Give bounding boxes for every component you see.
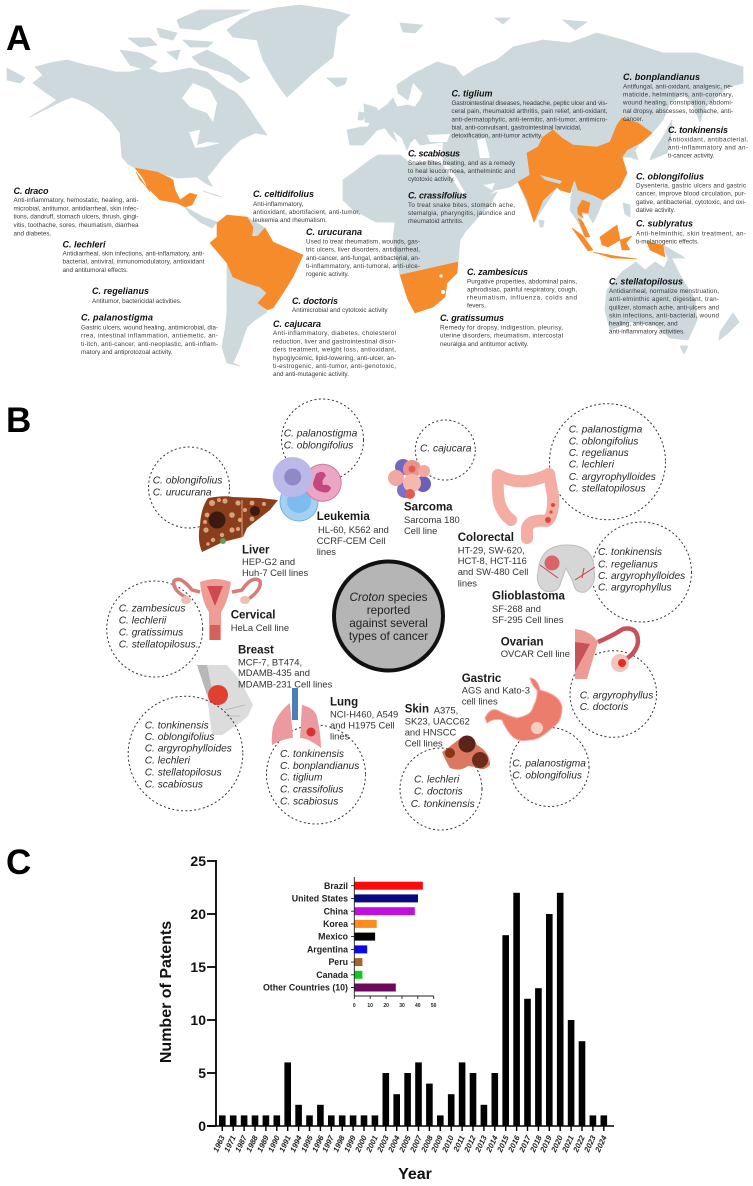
text: C. scabiosus: cytotoxic activity. (408, 176, 455, 183)
label: colorectal: HCT-8, HCT-116 (458, 555, 527, 566)
text: C. celtidifolius: C. celtidifolius (253, 189, 314, 199)
text: C. zambesicus: C. zambesicus (467, 267, 528, 277)
x axis year labels: 2024 (593, 1133, 609, 1154)
text: C. tonkinensis: C. tonkinensis (668, 125, 728, 135)
species circle: gastric (510, 728, 589, 806)
text: C. oblongifolius: Dysenteria, gastric ulcers and gastric (636, 183, 746, 190)
text: C. scabiosus: Snake bites treating, and as a remedy (408, 160, 516, 167)
text: C. zambesicus: fevers. (467, 303, 486, 310)
icon: skin lesion (442, 736, 490, 770)
inset country labels: China (324, 906, 348, 916)
map: highlighted countries (135, 118, 665, 313)
text: C. celtidifolius: antioxidant, abortifacient, anti-tumor, (253, 209, 360, 216)
label: lung (330, 696, 398, 741)
panel label A: A (6, 19, 31, 58)
species circle: breast: C. stellatopilosus (145, 767, 222, 778)
species circle: lung (266, 725, 366, 824)
text: C. stellatopilosus: healing, anti-cancer, and (609, 320, 678, 327)
label: breast: Breast (238, 644, 274, 656)
centre circle: reported (367, 604, 410, 617)
inset: patents by country bar chart (263, 877, 437, 1009)
text: C. crassifolius: stemalgia, pharyngitis, jaundice and (408, 210, 515, 217)
text: C. stellatopilosus: skin infections, anti-bacterial, wound (609, 312, 719, 319)
text: C. palanostigma: C. palanostigma (81, 313, 153, 323)
species circle: lung: C. tiglium (280, 772, 323, 783)
text: C. stellatopilosus (609, 277, 719, 336)
inset country labels: Korea (323, 919, 348, 929)
label: ovarian: OVCAR Cell line (501, 648, 570, 659)
species circle: colorectal: C. stellatopilosus (569, 484, 646, 495)
label: skin: Cell lines (405, 738, 443, 749)
label: gastric (462, 673, 530, 707)
species circle: sarcoma: C. cajucara (420, 444, 472, 455)
species circle: gastric: C. oblongifolius (512, 770, 582, 781)
species circle: ovarian: C. doctoris (580, 702, 628, 713)
species circle: glioblastoma (592, 522, 692, 622)
icon: sarcoma cell cluster (388, 459, 431, 499)
x axis year labels: 2001 (364, 1134, 380, 1154)
text: C. crassifolius: C. crassifolius (408, 191, 467, 201)
label: liver: HEP-G2 and (242, 556, 295, 567)
text: C. zambesicus: rheumatism, influenza, colds and (467, 295, 577, 302)
x axis year labels: 2014 (484, 1133, 500, 1154)
text: C. zambesicus (467, 267, 577, 310)
inset country labels: Other Countries (10) (263, 983, 348, 993)
text: C. oblongifolius (636, 171, 746, 214)
text: C. sublyratus: Anti-helminthic, skin treatment, an- (636, 230, 746, 237)
text: C. cajucara: C. cajucara (273, 319, 321, 329)
text: C. tiglium: anti-dermatophytic, anti-termitic, anti-tumor, antimicro- (452, 116, 608, 123)
x axis year labels: 1995 (299, 1133, 315, 1154)
text: C. zambesicus: Purgative properties, abdominal pains, (467, 278, 577, 285)
text: C. cajucara (273, 319, 396, 378)
label: skin (405, 704, 470, 749)
x axis year labels: 2017 (517, 1133, 533, 1154)
text: C. draco: microbial, antitumor, antidiarrheal, skin infec- (14, 205, 138, 212)
text: C. bonplandianus (622, 72, 733, 123)
panel label B: B (6, 401, 31, 440)
text: C. tiglium (452, 88, 608, 139)
label: glioblastoma (492, 591, 565, 625)
text: C. stellatopilosus: C. stellatopilosus (609, 277, 683, 287)
text: C. palanostigma: rrea, intestinal inflammation, antiemetic, an- (81, 333, 218, 340)
x axis year labels: 2020 (549, 1133, 565, 1154)
text: C. draco: and diabetes. (14, 230, 52, 237)
y axis with ticks: 10 (190, 1012, 206, 1028)
label: glioblastoma: Glioblastoma (492, 591, 565, 603)
species circle: breast (128, 696, 243, 811)
inset value labels: 10 (367, 1003, 373, 1009)
species circle: skin (400, 748, 482, 830)
text: C. sublyratus: ti-melanogenic effects. (636, 239, 699, 246)
species circle: breast: C. scabiosus (145, 779, 203, 790)
panel B: cancer types diagram (107, 399, 691, 830)
label: leukemia (317, 511, 389, 557)
panel A: world map (7, 5, 743, 366)
x axis year labels: 1990 (266, 1133, 282, 1154)
species circle: cervical: C. stellatopilosus. (119, 639, 199, 650)
label: sarcoma: Sarcoma 180 (404, 514, 460, 525)
icon: brain (537, 545, 595, 592)
inset axes (351, 877, 434, 999)
text: C. tiglium: Gastrointestinal diseases, headache, peptic ulcer and vis- (452, 100, 608, 107)
text: C. draco: C. draco (14, 186, 49, 196)
species circle: leukemia (282, 399, 364, 481)
x axis year labels: 1988 (244, 1133, 260, 1154)
x axis year labels: 2010 (440, 1133, 456, 1154)
x axis year labels: 1971 (222, 1134, 238, 1154)
text: C. palanostigma (81, 313, 218, 356)
text: C. bonplandianus: wound healing, constipation, abdomi- (622, 100, 733, 107)
species circle: liver (148, 447, 230, 528)
label: sarcoma: Cell line (404, 525, 437, 536)
x axis year labels: 2021 (560, 1134, 576, 1154)
text: C. cajucara: reduction, liver and gastrointestinal disor- (273, 338, 396, 345)
label: ovarian (501, 637, 570, 659)
species circle: breast: C. oblongifolius (145, 732, 214, 743)
inset value labels: 20 (383, 1003, 389, 1009)
species circle: cervical: C. gratissimus (119, 627, 183, 638)
species circle: leukemia: C. oblongifolius (284, 440, 353, 451)
species circle: lung: C. scabiosus (280, 796, 338, 807)
species circle: ovarian: C. argyrophyllus (580, 690, 653, 701)
centre circle: types of cancer (349, 630, 428, 643)
label: liver (242, 544, 308, 578)
label: breast: MCF-7, BT474, (238, 656, 302, 667)
x axis year labels: 2018 (528, 1133, 544, 1154)
text: C. tiglium: C. tiglium (452, 88, 492, 98)
icon: cervix and uterus (174, 579, 260, 640)
text: C. stellatopilosus: Antidiarrheal, normalize menstruation, (609, 288, 719, 295)
species circle: skin: C. lechleri (414, 774, 460, 785)
label: leukemia: lines (317, 546, 336, 557)
text: C. gratissumus: C. gratissumus (440, 313, 504, 323)
text: C. scabiosus: to heal leucorrhoea, anthelmintic and (408, 168, 515, 175)
x axis year labels: 1991 (277, 1134, 293, 1154)
inset country labels: United States (292, 894, 348, 904)
inset bars (354, 882, 423, 992)
map: inland gaps (540, 175, 582, 210)
label: colorectal: and SW-480 Cell (458, 566, 528, 577)
label: lung: and H1975 Cell (330, 720, 395, 731)
species circle: skin: C. tonkinensis (411, 799, 475, 810)
x axis year labels: 2023 (582, 1133, 598, 1154)
label: skin: SK23, UACC62 (405, 715, 470, 726)
text: C. celtidifolius: leukemia and rheumatism. (253, 217, 327, 224)
x axis year labels: 2022 (571, 1133, 587, 1154)
label: leukemia: Leukemia (317, 511, 370, 523)
text: C. urucurana: ti-inflammatory, anti-tumoral, anti-ulce- (306, 263, 420, 270)
map: water cutouts (182, 83, 495, 194)
x axis year labels: 2005 (397, 1133, 413, 1154)
x axis year labels (211, 1133, 609, 1154)
y axis with ticks (190, 853, 216, 1134)
text: C. tiglium: bial, anti-convulsant, gastrointestinal larvicidal, (452, 124, 582, 131)
species circle: glioblastoma: C. regelianus (598, 559, 658, 570)
text: C. sublyratus: C. sublyratus (636, 219, 693, 229)
x axis year labels: 2012 (462, 1133, 478, 1154)
inset country labels: Peru (328, 957, 348, 967)
text: C. cajucara: and anti-mutagenic activity. (273, 371, 349, 378)
x axis year labels: 2003 (375, 1133, 391, 1154)
species circle: sarcoma (415, 420, 475, 480)
x axis year labels: 2008 (419, 1133, 435, 1154)
text: C. oblongifolius: cancer, improve blood circulation, pur- (636, 191, 746, 198)
text: C. tonkinensis: Antioxidant, antibacterial, (668, 136, 748, 143)
text: C. bonplandianus: cancer. (623, 116, 644, 123)
species circle: colorectal: C. oblongifolius (569, 436, 638, 447)
label: gastric: cell lines (462, 696, 498, 707)
label: leukemia: CCRF-CEM Cell (317, 535, 385, 546)
text: C. gratissumus (440, 313, 563, 348)
species circle: skin: C. doctoris (414, 786, 463, 797)
x axis year labels: 1963 (211, 1133, 227, 1154)
species circle: cervical: C. zambesicus (119, 604, 186, 615)
text: C. stellatopilosus: anti-elminthic agent, digestant, tran- (609, 296, 719, 303)
text: C. cajucara: Anti-inflammatory, diabetes, cholesterol (273, 330, 396, 337)
text: C. stellatopilosus: anti-inflammatory activities. (609, 329, 685, 336)
text: C. zambesicus: aphrodisiac, painful respiratory, cough, (467, 286, 577, 293)
label: glioblastoma: SF-268 and (492, 603, 541, 614)
label: colorectal: Colorectal (458, 532, 514, 544)
species circle: breast: C. argyrophylloides (145, 744, 232, 755)
text: C. urucurana (306, 227, 420, 278)
text: C. draco (14, 186, 139, 237)
panel label C: C (6, 843, 31, 882)
label: skin: and HNSCC (405, 726, 457, 737)
label: ovarian: Ovarian (501, 637, 544, 649)
x axis year labels: 1999 (342, 1133, 358, 1154)
text: C. palanostigma: Gastric ulcers, wound healing, antimicrobial, dia- (81, 324, 218, 332)
y axis with ticks: 15 (190, 959, 206, 975)
species circle: cervical: C. lechlerii (119, 615, 167, 626)
x axis year labels: 2013 (473, 1133, 489, 1154)
centre circle: against several (349, 617, 428, 630)
text: C. doctoris: C. doctoris (292, 296, 338, 306)
inset value labels: 40 (415, 1003, 421, 1009)
species circle: lung: C. crassifolius (280, 784, 343, 795)
text: C. cajucara: ders treatment, weight loss, antioxidant, (273, 347, 396, 354)
label: cervical: HeLa Cell line (231, 622, 289, 633)
icon: ovary (575, 629, 638, 679)
label: skin: Skin (405, 704, 429, 716)
text: C. tonkinensis: anti-inflammatory and an- (668, 144, 748, 151)
species circle: glioblastoma: C. tonkinensis (598, 547, 662, 558)
species circle: lung: C. bonplandianus (280, 761, 359, 772)
text: C. tonkinensis: ti-cancer activity. (668, 153, 715, 160)
centre circle (334, 562, 443, 670)
label: sarcoma: Sarcoma (404, 502, 453, 514)
text: C. oblongifolius: dative activity. (636, 207, 675, 214)
text: C. draco: Anti-inflammatory, hemostatic, healing, anti- (14, 197, 138, 204)
x axis title: Year (398, 1166, 432, 1183)
text: C. crassifolius: To treat snake bites, stomach ache, (408, 202, 515, 209)
label: lung: NCI-H460, A549 (330, 708, 398, 719)
text: C. urucurana: rogenic activity. (306, 271, 349, 278)
text: C. lechleri: and antitumoral effects. (62, 267, 128, 274)
text: C. celtidifolius: Anti-inflammatory, (253, 201, 304, 208)
inset country labels: Canada (316, 970, 348, 980)
species circle: colorectal: C. palanostigma (569, 424, 643, 435)
x axis year labels: 1987 (233, 1133, 249, 1154)
text: C. lechleri: Antidiarrheal, skin infections, anti-inflamatory, anti- (62, 250, 204, 257)
icon: lung (272, 688, 321, 748)
text: C. gratissumus: Remedy for dropsy, indigestion, pleurisy, (440, 325, 563, 332)
bars (219, 893, 607, 1126)
species circle: liver: C. oblongifolius (153, 476, 222, 487)
label: cervical (231, 610, 289, 633)
icon: stomach (485, 678, 562, 741)
text: C. oblongifolius: C. oblongifolius (636, 171, 704, 181)
inset country labels: Brazil (324, 881, 348, 891)
species circle: lung: C. tonkinensis (280, 749, 344, 760)
label: liver: Huh-7 Cell lines (242, 567, 308, 578)
text: C. bonplandianus: nal dropsy, abscesses, toothache, anti- (623, 108, 733, 115)
y axis with ticks: 25 (190, 853, 206, 869)
text: C. palanostigma: ti-itch, anti-cancer, anti-neoplastic, anti-inflam- (81, 341, 218, 348)
text: C. urucurana: Used to treat rheumatism, wounds, gas- (306, 238, 420, 245)
text: C. bonplandianus: maticide, helmintiasis, anti-coronary, (623, 91, 733, 98)
text: C. urucurana: C. urucurana (306, 227, 362, 237)
text: C. lechleri: C. lechleri (62, 240, 106, 250)
text: C. cajucara: ti-estrogenic, anti-tumor, anti-genotoxic, (273, 363, 396, 370)
text: C. urucurana: anti-cancer, anti-fungal, antibacterial, an- (306, 255, 420, 262)
text: C. cajucara: hypoglycemic, lipid-lowering, anti-ulcer, an- (273, 355, 396, 362)
species circle: cervical (107, 581, 203, 677)
inset country labels: Argentina (307, 944, 348, 954)
y axis with ticks: 0 (198, 1118, 206, 1134)
label: lung: Lung (330, 696, 358, 708)
text: C. tiglium: detoxification, anti-tumor activity. (452, 132, 543, 139)
label: sarcoma (404, 502, 460, 536)
label: breast: MDAMB-231 Cell lines (238, 678, 333, 689)
panel C: patents by year bar chart (158, 853, 614, 1183)
label: colorectal: HT-29, SW-620, (458, 545, 525, 556)
x axis year labels: 2015 (495, 1133, 511, 1154)
text: C. oblongifolius: gative, antibacterial, cytotoxic, and oxi- (636, 199, 746, 206)
species circle: glioblastoma: C. argyrophyllus (598, 583, 672, 594)
icon: colon (498, 474, 555, 538)
inset country labels (263, 881, 349, 993)
text: C. urucurana: tric ulcers, liver disorders, antidiarrheal, (306, 247, 420, 254)
x axis year labels: 1989 (255, 1133, 271, 1154)
x axis year labels: 1996 (310, 1133, 326, 1154)
text: C. bonplandianus: C. bonplandianus (623, 72, 700, 82)
x axis year labels: 2007 (408, 1133, 424, 1154)
text: C. palanostigma: matory and antiprotozoal activity. (81, 349, 173, 356)
x axis year labels: 2016 (506, 1133, 522, 1154)
inset value labels: 30 (399, 1003, 405, 1009)
text: C. stellatopilosus: quilizer, stomach ache, anti-ulcers and (609, 304, 719, 311)
text: C. crassifolius (408, 191, 515, 225)
label: lung: lines (330, 730, 350, 741)
inset value labels: 50 (431, 1003, 437, 1009)
label: breast: MDAMB-435 and (238, 667, 310, 678)
x axis with ticks (207, 1126, 614, 1131)
text: C. draco: vitis, toothache, sores, rheumatism, diarrhea (14, 222, 139, 229)
inset value labels: 0 (353, 1003, 356, 1009)
inset country labels: Mexico (318, 932, 349, 942)
map: grey land masses (7, 5, 743, 366)
species circle: colorectal (550, 404, 666, 520)
label: cervical: Cervical (231, 610, 275, 622)
text: C. scabiosus (408, 149, 516, 183)
label: leukemia: HL-60, K562 and (318, 524, 389, 535)
y axis with ticks: 5 (198, 1065, 206, 1081)
species circle: ovarian (570, 651, 657, 737)
x axis year labels: 2000 (353, 1133, 369, 1154)
species circle: glioblastoma: C. argyrophylloides (598, 571, 685, 582)
x axis year labels: 2004 (386, 1133, 402, 1154)
x axis year labels: 2011 (451, 1134, 467, 1154)
text: C. lechleri (62, 240, 205, 274)
species circle: breast: C. lechleri (145, 755, 191, 766)
species circle: colorectal: C. regelianus (569, 448, 629, 459)
x axis year labels: 2019 (538, 1133, 554, 1154)
text: C. lechleri: bacterial, antiviral, inmunomodulatory, antioxidant (62, 259, 205, 266)
species circle: leukemia: C. palanostigma (284, 429, 358, 440)
icon: breast (197, 665, 253, 735)
text: C. tiglium: ceral pain, rheumatoid arthritis, pain relief, anti-oxidant, (452, 108, 608, 115)
x axis year labels: 2009 (429, 1133, 445, 1154)
text: C. regelianus: Antitumor, bactericidal activities. (92, 298, 182, 305)
text: C. bonplandianus: Antifungal, anti-oxidant, analgesic, ne- (623, 83, 733, 90)
species circle: liver: C. urucurana (153, 487, 212, 498)
icon: liver (199, 496, 278, 552)
x axis year labels: 1998 (331, 1133, 347, 1154)
text: C. crassifolius: rheumatoid arthritis. (408, 218, 464, 225)
text: C. gratissumus: neuralgia and antitumor activity. (440, 341, 529, 348)
text: C. draco: tions, dandruff, stomach ulcers, thrush, gingi- (14, 214, 138, 221)
inset value labels (353, 1003, 437, 1009)
text: C. doctoris: Antimicrobial and cytotoxic activity (292, 307, 388, 314)
label: colorectal (458, 532, 528, 588)
centre circle: Croton species (350, 591, 428, 604)
text: C. doctoris (292, 296, 388, 314)
text: C. regelianus: C. regelianus (92, 286, 149, 296)
label: glioblastoma: SF-295 Cell lines (492, 614, 564, 625)
label: skin: A375, (434, 704, 458, 715)
x axis year labels: 1997 (320, 1133, 336, 1154)
text: C. tonkinensis (668, 125, 748, 160)
y axis with ticks: 20 (190, 906, 206, 922)
text: C. celtidifolius (253, 189, 360, 224)
species circle: colorectal: C. lechleri (569, 460, 615, 471)
x axis year labels: 1994 (288, 1133, 304, 1154)
label: gastric: Gastric (462, 673, 502, 685)
text: C. sublyratus (636, 219, 746, 246)
species circle: gastric: C. palanostigma (512, 759, 586, 770)
label: gastric: AGS and Kato-3 (462, 684, 530, 695)
label: colorectal: lines (458, 577, 477, 588)
text: C. regelianus (92, 286, 182, 305)
label: breast (238, 644, 333, 689)
species circle: breast: C. tonkinensis (145, 720, 209, 731)
text: C. scabiosus: C. scabiosus (408, 149, 460, 159)
label: liver: Liver (242, 544, 270, 556)
y axis title: Number of Patents (158, 921, 175, 1063)
icon: leukemia cells (273, 457, 341, 521)
text: C. gratissumus: uterine disorders, rheumatism, intercostal (440, 333, 563, 340)
species circle: colorectal: C. argyrophylloides (569, 472, 656, 483)
